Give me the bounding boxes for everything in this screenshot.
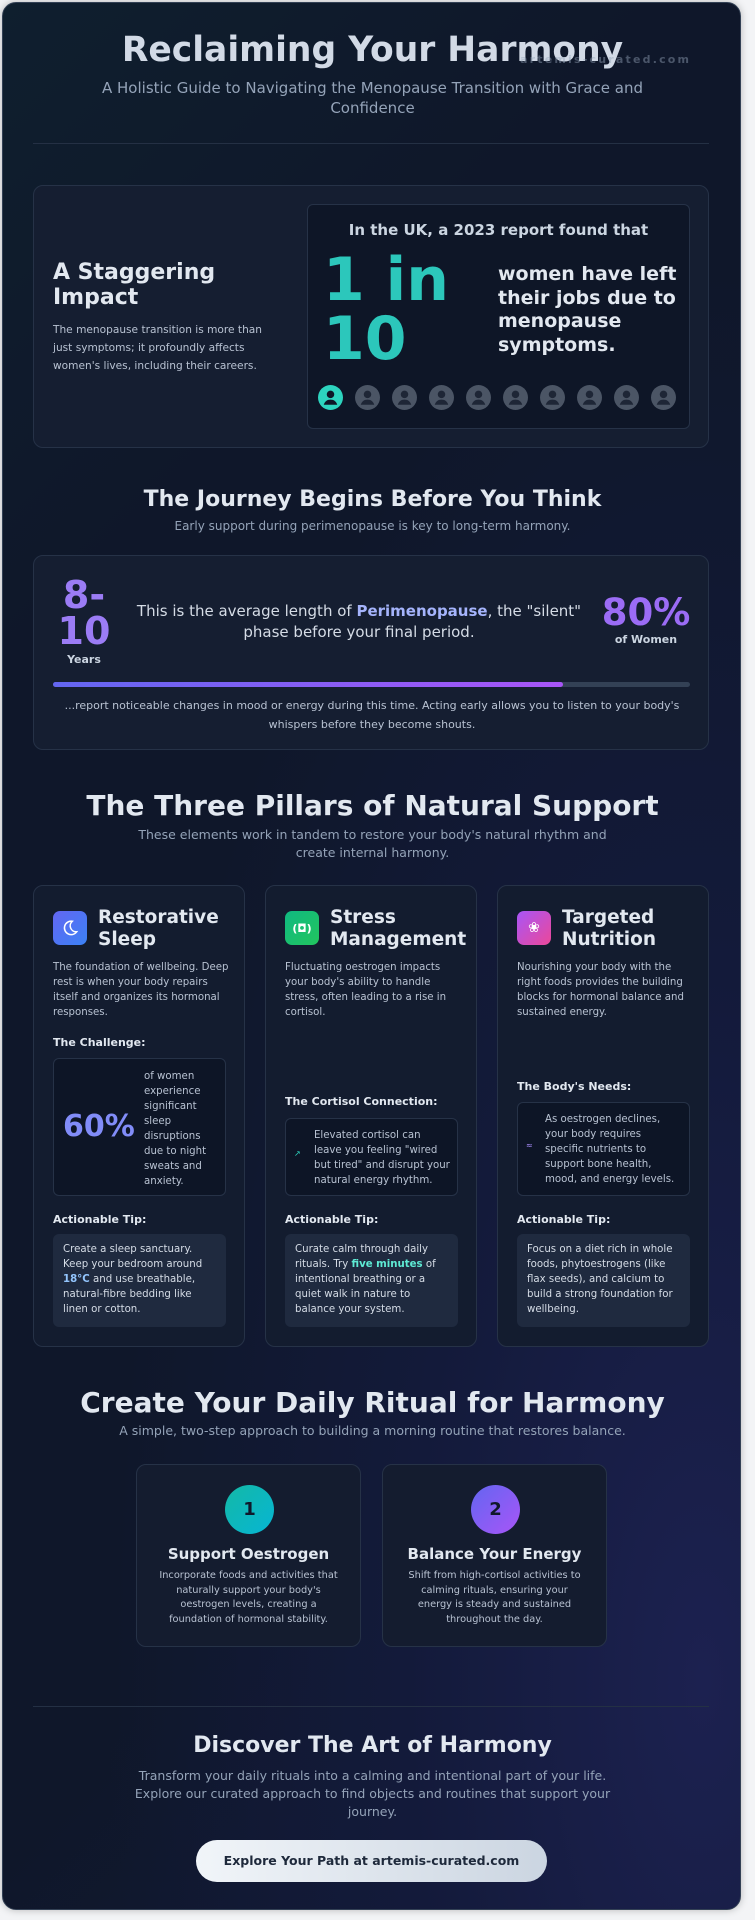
stat text: women have left their jobs due to menopause symptoms. (498, 263, 676, 356)
challenge box 60% (53, 1058, 226, 1196)
needs box: ≈ (526, 1141, 533, 1150)
circle 1 (225, 1485, 274, 1534)
big number (323, 245, 449, 374)
heading: Sleep (98, 929, 156, 950)
stat: 8-10 years: 10 (58, 609, 110, 653)
subheading: journey: Early support during perimenopause is key to long-term harmony. (174, 519, 570, 533)
stat intro: In the UK, a 2023 report found that (349, 221, 648, 239)
button: cta (196, 1840, 547, 1882)
icon: broadcast (285, 911, 319, 945)
heading: Targeted (562, 907, 654, 928)
label: tip: Actionable Tip: (285, 1213, 378, 1226)
step 2: balance your energy (382, 1464, 607, 1647)
heading: three pillars: The Three Pillars of Natural Support (86, 789, 659, 822)
cortisol box: Elevated cortisol can leave you feeling "wired but tired" and disrupt your natural energy rhythm. (314, 1130, 450, 1186)
step 1: support oestrogen: Incorporate foods and activities that naturally support your body's oestrogen levels, creating a foundation of hormonal stability. (159, 1570, 338, 1624)
watermark: artemis-curated.com (520, 53, 691, 66)
text: impact description: The menopause transition is more than just symptoms; it profoundly affects women's lives, including their careers. (53, 324, 262, 372)
stat: 8-10 years: 8- (63, 573, 105, 617)
subtitle: A Holistic Guide to Navigating the Menopause Transition with Grace and Confidence (102, 79, 643, 117)
icon row: 10 women (318, 385, 676, 410)
heading: Management (330, 929, 466, 950)
tip box (285, 1234, 458, 1327)
icon: moon (53, 911, 87, 945)
subheading: daily ritual: A simple, two-step approach to building a morning routine that restores balance. (119, 1423, 626, 1438)
label: tip: Actionable Tip: (517, 1213, 610, 1226)
label: the challenge: The Challenge: (53, 1036, 146, 1049)
icon: nutrition (517, 911, 551, 945)
tip box: Focus on a diet rich in whole foods, phytoestrogens (like flax seeds), and calcium to build a strong foundation for wellbeing. (527, 1244, 673, 1315)
heading: journey: The Journey Begins Before You Think (144, 487, 601, 512)
heading (330, 907, 466, 950)
tip box: Curate calm through daily rituals. Try five minutes of intentional breathing or a quiet walk in nature to balance your system. (295, 1244, 436, 1315)
stat: 8-10 years (58, 573, 110, 666)
heading: daily ritual: Create Your Daily Ritual for Harmony (80, 1386, 665, 1419)
big number: 1 in (323, 245, 449, 315)
stat: 8-10 years: Years (67, 653, 101, 666)
description: The foundation of wellbeing. Deep rest is when your body repairs itself and organizes its hormonal responses. (53, 962, 229, 1018)
heading: Nutrition (562, 929, 656, 950)
challenge box 60%: 60% (63, 1109, 135, 1144)
tip box (53, 1234, 226, 1327)
needs box (517, 1102, 690, 1196)
text: footer note: ...report noticeable changes in mood or energy during this time. Acting early allows you to listen to your body's whispers before they become shouts. (65, 699, 679, 731)
panel: staggering impact (33, 185, 709, 448)
needs box: As oestrogen declines, your body requires specific nutrients to support bone health, mood, and energy levels. (545, 1114, 674, 1185)
icon: nutrition: ❀ (528, 920, 540, 936)
cortisol box: ↗ (294, 1149, 301, 1158)
stat box: 1 in 10 (307, 204, 690, 429)
icon: broadcast: (◘) (292, 922, 312, 934)
heading: a staggering impact: A Staggering (53, 260, 215, 285)
step 1: support oestrogen (136, 1464, 361, 1647)
tip box (517, 1234, 690, 1327)
button: cta: Explore Your Path at artemis-curated.com (224, 1853, 519, 1868)
step 1: support oestrogen: Support Oestrogen (168, 1545, 329, 1563)
stat: 80% of women: of Women (615, 633, 677, 646)
step 2: balance your energy: Shift from high-cortisol activities to calming rituals, ensuring your energy is steady and sustained throughout the day. (408, 1570, 581, 1624)
description: Fluctuating oestrogen impacts your body's ability to handle stress, often leading to a rise in cortisol. (285, 962, 446, 1018)
label: body's needs: The Body's Needs: (517, 1080, 631, 1093)
circle 2: 2 (489, 1499, 502, 1520)
heading: discover: Discover The Art of Harmony (193, 1733, 552, 1758)
challenge box 60%: of women experience significant sleep disruptions due to night sweats and anxiety. (144, 1071, 206, 1187)
cortisol box (285, 1118, 458, 1196)
heading: Restorative (98, 907, 219, 928)
panel: targeted nutrition (497, 885, 709, 1347)
tip box: Create a sleep sanctuary. Keep your bedroom around 18°C and use breathable, natural-fibre bedding like linen or cotton. (63, 1244, 202, 1315)
title: Reclaiming Your Harmony (122, 30, 623, 70)
heading: Stress (330, 907, 396, 928)
panel: perimenopause (33, 555, 709, 750)
circle 2 (471, 1485, 520, 1534)
text: perimenopause definition: This is the average length of Perimenopause, the "silent" phase before your final period. (137, 602, 581, 641)
circle 1: 1 (243, 1499, 256, 1520)
heading: a staggering impact: Impact (53, 285, 138, 310)
stat: 80% of women: 80% (602, 591, 690, 634)
description: Nourishing your body with the right foods provides the building blocks for hormonal balance and sustained energy. (517, 962, 684, 1018)
heading: a staggering impact (53, 260, 215, 310)
label: cortisol: The Cortisol Connection: (285, 1095, 438, 1108)
big number: 10 (323, 304, 406, 374)
heading (562, 907, 656, 950)
label: tip: Actionable Tip: (53, 1213, 146, 1226)
subheading: three pillars: These elements work in tandem to restore your body's natural rhythm and create internal harmony. (138, 827, 607, 860)
text: discover: Transform your daily rituals into a calming and intentional part of your life. Explore our curated approach to find objects and routines that support your journey. (135, 1768, 610, 1819)
panel: restorative sleep (33, 885, 245, 1347)
step 2: balance your energy: Balance Your Energy (408, 1545, 581, 1563)
progress bar 80% (53, 682, 690, 687)
heading (98, 907, 219, 950)
panel: stress management (265, 885, 477, 1347)
